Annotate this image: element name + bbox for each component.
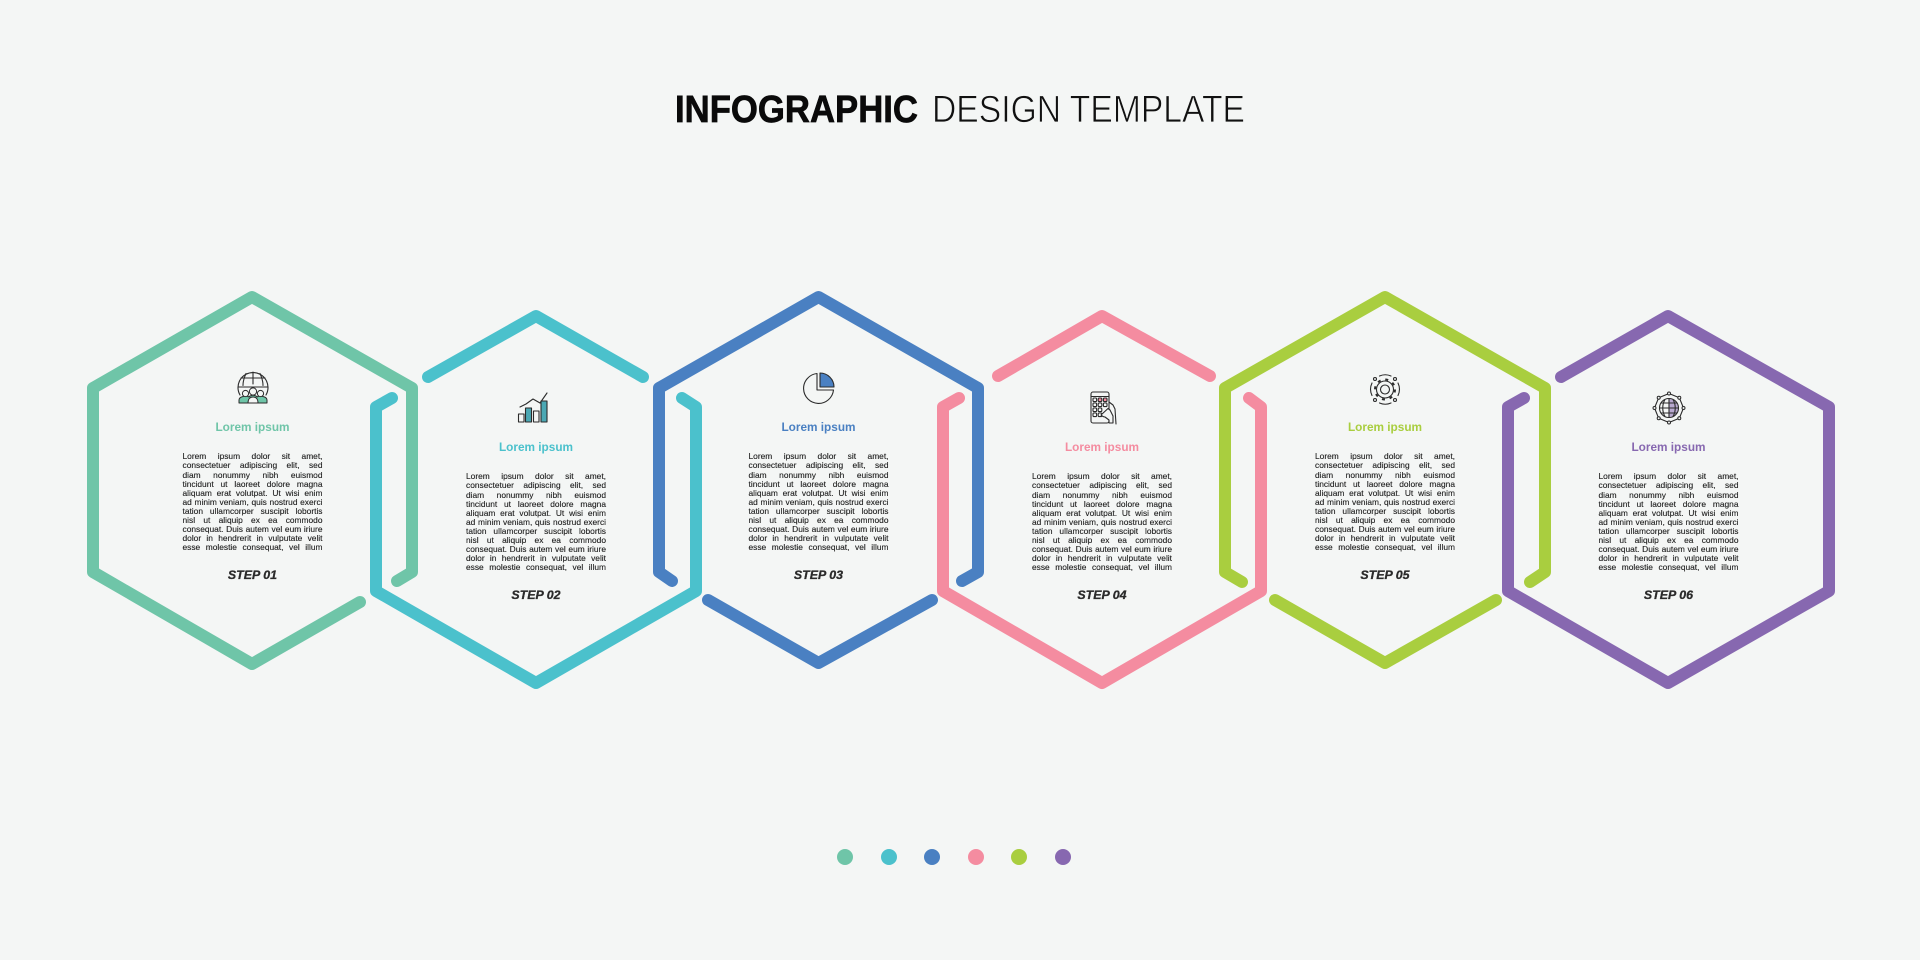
body text: step 01: consequat. Duis autem vel eum iriure — [182, 524, 322, 534]
body text: step 05: Lorem ipsum dolor sit amet, — [1315, 451, 1455, 461]
body text: step 04: tation ullamcorper suscipit lobortis — [1032, 526, 1172, 536]
icon: bar chart with trend line — [518, 392, 548, 422]
body text: step 02: consequat. Duis autem vel eum iriure — [466, 544, 606, 554]
body text: step 02: dolor in hendrerit in vulputate velit — [466, 553, 606, 563]
body text: step 03: Lorem ipsum dolor sit amet, — [748, 451, 888, 461]
body text: step 04: ad minim veniam, quis nostrud exerci — [1032, 517, 1172, 527]
heading: step 03: Lorem ipsum — [781, 420, 856, 434]
body text: step 06: nisl ut aliquip ex ea commodo — [1598, 535, 1738, 545]
icon: pie chart — [803, 372, 834, 404]
body text: step 04: diam nonummy nibh euismod — [1032, 490, 1172, 500]
body text: step 03: aliquam erat volutpat. Ut wisi enim — [748, 488, 888, 498]
body text: step 01: ad minim veniam, quis nostrud exerci — [182, 497, 322, 507]
body text: step 01: tincidunt ut laoreet dolore magna — [182, 479, 322, 489]
title — [675, 89, 1245, 131]
step label: 03: STEP 03 — [794, 568, 843, 582]
body text: step 04: consequat. Duis autem vel eum iriure — [1032, 544, 1172, 554]
body text: step 05: aliquam erat volutpat. Ut wisi enim — [1315, 488, 1455, 498]
hexagon outline: step 02 — [370, 310, 702, 689]
body text: step 03: nisl ut aliquip ex ea commodo — [748, 515, 888, 525]
body text: step 06: consequat. Duis autem vel eum iriure — [1598, 544, 1738, 554]
body text: step 06: tation ullamcorper suscipit lobortis — [1598, 526, 1738, 536]
step label: 01: STEP 01 — [228, 568, 277, 582]
body text: step 02: tation ullamcorper suscipit lobortis — [466, 526, 606, 536]
hexagon outline: step 01 — [87, 291, 418, 670]
body text: step 05: tincidunt ut laoreet dolore magna — [1315, 479, 1455, 489]
body text: step 02 — [466, 471, 606, 572]
body text: step 04: esse molestie consequat, vel illum — [1032, 562, 1172, 572]
body text: step 02: aliquam erat volutpat. Ut wisi enim — [466, 508, 606, 518]
panel: step 05 — [1219, 291, 1551, 669]
hexagon outline: step 03 — [653, 291, 984, 669]
body text: step 05: consectetuer adipiscing elit, sed — [1315, 460, 1455, 470]
body text: step 03: esse molestie consequat, vel illum — [748, 542, 888, 552]
body text: step 05: ad minim veniam, quis nostrud exerci — [1315, 497, 1455, 507]
icon: gear with circular arrows — [1370, 374, 1400, 405]
body text: step 04: tincidunt ut laoreet dolore magna — [1032, 499, 1172, 509]
title: DESIGN TEMPLATE — [932, 89, 1245, 131]
body text: step 06: dolor in hendrerit in vulputate velit — [1598, 553, 1738, 563]
body text: step 05 — [1315, 451, 1456, 552]
body text: step 04: consectetuer adipiscing elit, sed — [1032, 480, 1172, 490]
heading: step 01: Lorem ipsum — [215, 420, 290, 434]
body text: step 05: tation ullamcorper suscipit lobortis — [1315, 506, 1455, 516]
heading: step 04: Lorem ipsum — [1065, 440, 1139, 454]
body text: step 02: Lorem ipsum dolor sit amet, — [466, 471, 606, 481]
body text: step 02: nisl ut aliquip ex ea commodo — [466, 535, 606, 545]
body text: step 05: consequat. Duis autem vel eum iriure — [1315, 524, 1455, 534]
body text: step 03: tation ullamcorper suscipit lobortis — [748, 506, 888, 516]
body text: step 01: diam nonummy nibh euismod — [182, 470, 322, 480]
body text: step 02: tincidunt ut laoreet dolore magna — [466, 499, 606, 509]
heading: step 05: Lorem ipsum — [1348, 420, 1422, 434]
body text: step 03: diam nonummy nibh euismod — [748, 470, 888, 480]
panel: step 01 — [87, 291, 418, 670]
body text: step 03: ad minim veniam, quis nostrud exerci — [748, 497, 888, 507]
icon: globe with people — [237, 372, 269, 404]
heading: step 02: Lorem ipsum — [499, 440, 573, 454]
body text: step 04: Lorem ipsum dolor sit amet, — [1032, 471, 1172, 481]
body text: step 01: Lorem ipsum dolor sit amet, — [182, 451, 322, 461]
body text: step 05: esse molestie consequat, vel illum — [1315, 542, 1455, 552]
body text: step 04: nisl ut aliquip ex ea commodo — [1032, 535, 1172, 545]
body text: step 01: tation ullamcorper suscipit lobortis — [182, 506, 322, 516]
body text: step 02: diam nonummy nibh euismod — [466, 490, 606, 500]
body text: step 04 — [1032, 471, 1172, 572]
body text: step 05: diam nonummy nibh euismod — [1315, 470, 1455, 480]
body text: step 06 — [1598, 471, 1739, 572]
body text: step 01: nisl ut aliquip ex ea commodo — [182, 515, 322, 525]
body text: step 05: nisl ut aliquip ex ea commodo — [1315, 515, 1455, 525]
body text: step 06: consectetuer adipiscing elit, sed — [1598, 480, 1738, 490]
body text: step 01 — [182, 451, 323, 552]
title: INFOGRAPHIC — [675, 89, 918, 131]
panel: step 02 — [370, 310, 702, 689]
body text: step 02: esse molestie consequat, vel illum — [466, 562, 606, 572]
hexagon outline: step 05 — [1219, 291, 1551, 669]
body text: step 06: diam nonummy nibh euismod — [1598, 490, 1738, 500]
step label: 05: STEP 05 — [1360, 568, 1410, 582]
icon: calculator in hand — [1090, 392, 1117, 424]
body text: step 04: dolor in hendrerit in vulputate velit — [1032, 553, 1172, 563]
body text: step 06: Lorem ipsum dolor sit amet, — [1598, 471, 1738, 481]
body text: step 06: tincidunt ut laoreet dolore magna — [1598, 499, 1738, 509]
body text: step 01: dolor in hendrerit in vulputate velit — [182, 533, 322, 543]
body text: step 03: consequat. Duis autem vel eum iriure — [748, 524, 888, 534]
panel: step 04 — [937, 310, 1267, 690]
body text: step 01: aliquam erat volutpat. Ut wisi enim — [182, 488, 322, 498]
hexagon outline: step 06 — [1502, 310, 1835, 689]
body text: step 01: consectetuer adipiscing elit, sed — [182, 460, 322, 470]
body text: step 06: aliquam erat volutpat. Ut wisi enim — [1598, 508, 1738, 518]
body text: step 02: consectetuer adipiscing elit, sed — [466, 480, 606, 490]
body text: step 04: aliquam erat volutpat. Ut wisi enim — [1032, 508, 1172, 518]
panel: step 03 — [653, 291, 984, 669]
hexagon outline: step 04 — [937, 310, 1267, 690]
heading: step 06: Lorem ipsum — [1631, 440, 1706, 454]
panel: step 06 — [1502, 310, 1835, 689]
body text: step 06: ad minim veniam, quis nostrud exerci — [1598, 517, 1738, 527]
colour dots row — [837, 849, 1071, 865]
step label: 04: STEP 04 — [1077, 588, 1127, 602]
body text: step 03: tincidunt ut laoreet dolore magna — [748, 479, 888, 489]
step label: 06: STEP 06 — [1644, 588, 1693, 602]
body text: step 05: dolor in hendrerit in vulputate velit — [1315, 533, 1455, 543]
body text: step 03: dolor in hendrerit in vulputate velit — [748, 533, 888, 543]
body text: step 06: esse molestie consequat, vel illum — [1598, 562, 1738, 572]
body text: step 03: consectetuer adipiscing elit, sed — [748, 460, 888, 470]
body text: step 03 — [748, 451, 889, 552]
step label: 02: STEP 02 — [511, 588, 561, 602]
icon: networked globe — [1652, 392, 1686, 424]
body text: step 02: ad minim veniam, quis nostrud exerci — [466, 517, 606, 527]
body text: step 01: esse molestie consequat, vel illum — [182, 542, 322, 552]
